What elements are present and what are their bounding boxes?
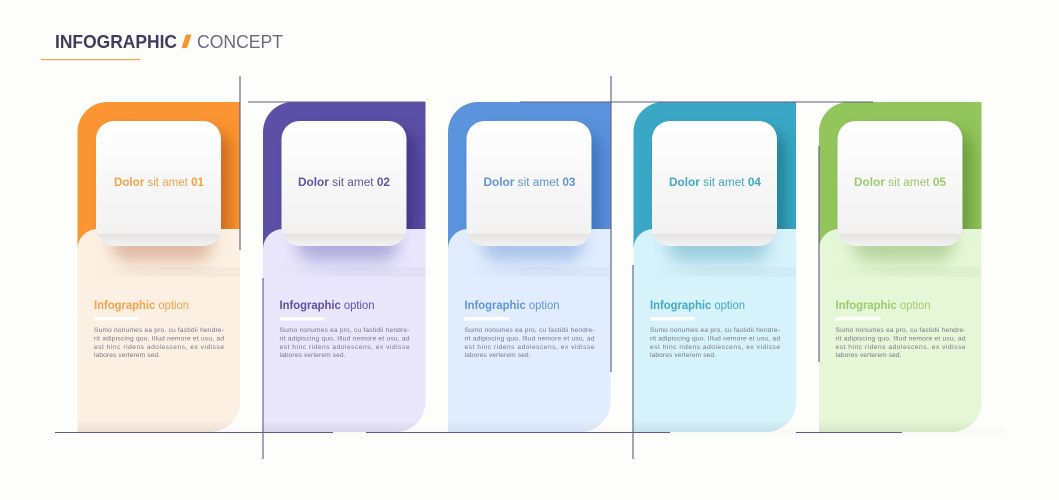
panel: option 04 [634,102,796,432]
text block 04: Infographic option [650,298,745,312]
text block 03: est hinc ridens adolescens, ex vidisse [464,344,595,351]
text block 01: Sumo nonumes ea pro, cu fastidii hendre- [94,327,224,334]
text block 05 [836,298,966,359]
text block 02: rit adipiscing quo. Illud nemore et usu, ad [280,336,410,342]
title: INFOGRAPHIC [55,31,177,52]
panel 04 header [634,102,796,249]
panel: option 01 [78,102,240,432]
text block 02: Sumo nonumes ea pro, cu fastidii hendre- [280,327,410,334]
panel 01 header [78,102,240,249]
card 04 [652,121,777,246]
title slash [182,34,192,48]
title underline [41,59,140,60]
text block 03: Sumo nonumes ea pro, cu fastidii hendre- [464,327,594,334]
text block 01 [94,298,224,359]
title: CONCEPT [197,31,283,52]
card 03 label: Dolor sit amet 03 [484,177,576,189]
card 05 [838,121,962,246]
card 01 [96,121,221,246]
text block 04: rit adipiscing quo. Illud nemore et usu, ad [650,336,780,342]
panel: option 02 [263,102,426,432]
text block 04 [650,298,780,359]
card 02 [282,121,406,246]
text block 03: labores verterem sed. [464,352,531,359]
panel: option 03 [448,102,610,432]
text block 01: labores verterem sed. [94,352,160,359]
text block 04: est hinc ridens adolescens, ex vidisse [650,344,780,351]
panel 02 header [263,102,426,249]
text block 02: labores verterem sed. [280,352,346,359]
text block 05: est hinc ridens adolescens, ex vidisse [836,344,966,351]
floor shadow [80,429,1005,432]
panel 01 body [78,229,240,432]
panel 04 body [634,229,796,432]
text block 03: Infographic option [464,298,560,312]
card 02 label: Dolor sit amet 02 [298,177,390,189]
text block 03: rit adipiscing quo. Illud nemore et usu, ad [464,336,595,342]
card 01 label: Dolor sit amet 01 [114,177,205,189]
text block 05: labores verterem sed. [836,352,902,359]
text block 05: rit adipiscing quo. Illud nemore et usu, ad [836,336,966,342]
panel 03 body [448,229,610,432]
text block 02: Infographic option [280,298,374,312]
panel 03 header [448,102,610,249]
card 04 label: Dolor sit amet 04 [669,177,762,189]
text block 04: labores verterem sed. [650,352,716,359]
text block 01: est hinc ridens adolescens, ex vidisse [94,344,224,351]
panel: option 05 [819,102,982,432]
title [55,31,283,52]
text block 02 [280,298,410,359]
text block 05: Sumo nonumes ea pro, cu fastidii hendre- [836,327,966,334]
panel 05 body [819,229,982,432]
text block 05: Infographic option [836,298,930,312]
text block 03 [464,298,595,359]
text block 04: Sumo nonumes ea pro, cu fastidii hendre- [650,327,780,334]
panel 05 header [819,102,982,244]
card 03 [466,121,592,246]
text block 01: rit adipiscing quo. Illud nemore et usu, ad [94,336,224,342]
card 05 label: Dolor sit amet 05 [854,177,947,189]
text block 02: est hinc ridens adolescens, ex vidisse [280,344,410,351]
text block 01: Infographic option [94,298,189,312]
panel 02 body [263,229,426,432]
